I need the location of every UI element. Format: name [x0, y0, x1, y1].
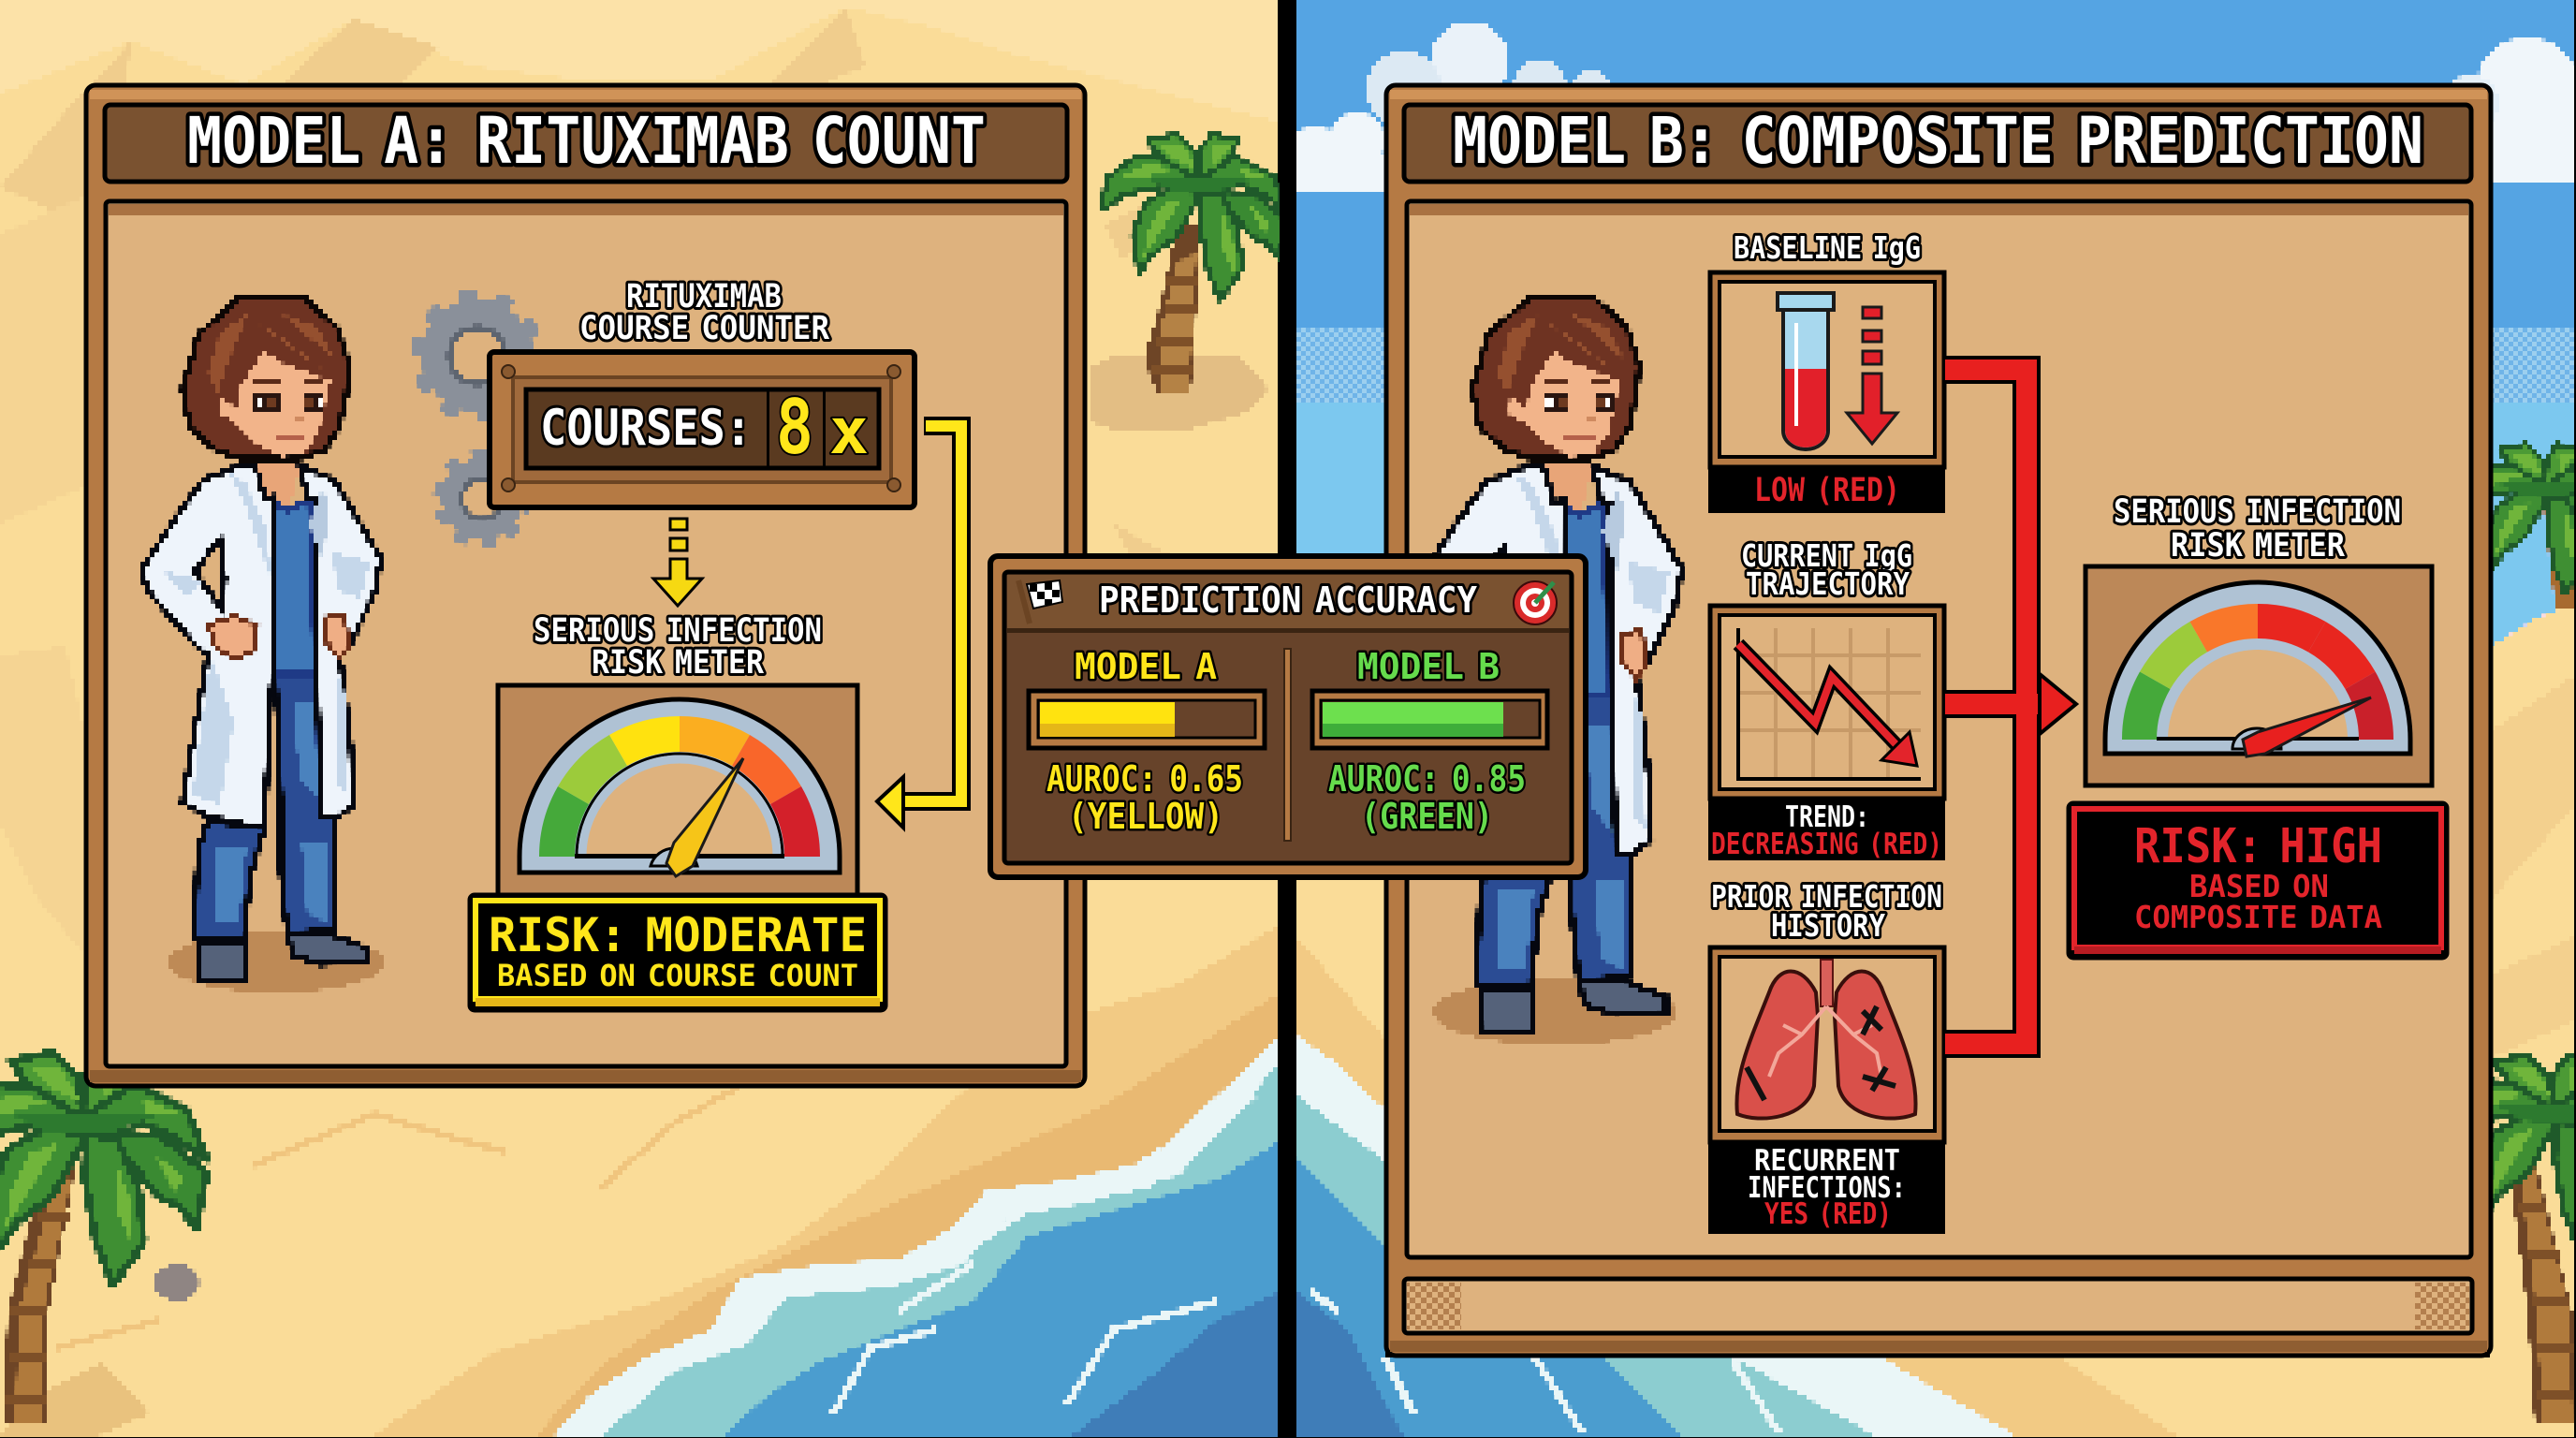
arrows: red connectors merging into meter: [1945, 370, 2076, 1044]
course counter box: [490, 352, 915, 507]
line chart: decreasing: [1738, 628, 1921, 779]
callout: risk high: RISK: HIGH: [2134, 819, 2382, 874]
callout: risk moderate: BASED ON COURSE COUNT: [497, 958, 858, 993]
card: baseline IgG: [1708, 272, 1945, 513]
rock: [154, 1264, 199, 1301]
panel: Model A: [86, 85, 1085, 1086]
column: Model A accuracy: AUROC: 0.65: [1046, 758, 1243, 800]
palm tree: top: [1101, 134, 1287, 395]
gauge needle A: [666, 758, 743, 876]
column: Model B accuracy: (GREEN): [1361, 796, 1493, 837]
panel: Model B: [1386, 85, 2491, 1356]
heading: risk meter B: [2114, 493, 2401, 565]
clouds: [1287, 22, 2576, 193]
heading: course counter: RITUXIMAB: [626, 278, 782, 315]
heading: current IgG trajectory: [1741, 538, 1912, 602]
column: Model A accuracy: [1029, 646, 1265, 837]
course counter box: 8: [776, 384, 813, 471]
heading: baseline IgG: BASELINE IgG: [1734, 230, 1921, 266]
callout: risk moderate: RISK: MODERATE: [489, 908, 867, 962]
card: current IgG trajectory: [1708, 606, 1945, 861]
card: baseline IgG: LOW (RED): [1754, 472, 1900, 509]
heading: current IgG trajectory: TRAJECTORY: [1746, 566, 1910, 602]
heading: prior infection history: PRIOR INFECTION: [1711, 879, 1942, 915]
bottom strip: [1404, 1279, 2472, 1333]
background: sky, ocean and beach (right half): [1287, 0, 2576, 1438]
gauge needle B: [2243, 697, 2371, 756]
card: current IgG trajectory: TREND:: [1785, 800, 1869, 834]
callout: risk high: BASED ON: [2189, 869, 2329, 904]
character: clinician A: [142, 296, 384, 992]
inner panel: Model B: [1407, 201, 2471, 1257]
heading: risk meter B: RISK METER: [2171, 527, 2345, 565]
column: Model B accuracy: AUROC: 0.85: [1328, 758, 1526, 800]
callout: risk high: [2069, 803, 2447, 958]
column: Model A accuracy: MODEL A: [1075, 646, 1217, 687]
heading: course counter: COURSE COUNTER: [579, 310, 829, 347]
callout: risk moderate: [470, 895, 886, 1010]
palm tree: bottom left: [0, 1052, 207, 1425]
heading: current IgG trajectory: CURRENT IgG: [1741, 538, 1912, 574]
column: Model B accuracy: [1312, 646, 1547, 837]
palm tree: upper right: [2494, 440, 2574, 609]
arrow: dashed down to meter: [653, 519, 702, 606]
heading bar: Model B: MODEL B: COMPOSITE PREDICTION: [1453, 104, 2423, 179]
course counter box: x: [829, 395, 869, 469]
column: Model B accuracy: MODEL B: [1357, 646, 1500, 687]
card: prior infection history: [1708, 947, 1945, 1234]
heading: course counter: [579, 278, 829, 347]
card: current IgG trajectory: DECREASING (RED): [1711, 828, 1942, 861]
icon: lungs: [1736, 960, 1916, 1119]
callout: risk high: COMPOSITE DATA: [2134, 900, 2382, 935]
icon: small gear: [438, 455, 526, 543]
panel: prediction accuracy: [990, 556, 1586, 877]
card: prior infection history: INFECTIONS:: [1748, 1171, 1906, 1205]
risk meter B: [2086, 566, 2432, 785]
heading bar: Model A: MODEL A: RITUXIMAB COUNT: [187, 104, 986, 179]
heading: risk meter A: RISK METER: [592, 644, 764, 682]
heading: risk meter A: SERIOUS INFECTION: [534, 612, 822, 650]
heading: risk meter A: [534, 612, 822, 682]
card: prior infection history: YES (RED): [1764, 1197, 1892, 1231]
inner panel: Model A: [106, 201, 1066, 1066]
character: clinician B: [1419, 296, 1682, 1045]
heading: prediction accuracy: PREDICTION ACCURACY: [1099, 580, 1477, 621]
icon: red down arrow: [1847, 307, 1897, 444]
course counter box: COURSES:: [540, 400, 752, 457]
heading: prior infection history: HISTORY: [1771, 908, 1885, 944]
palm tree: lower right: [2494, 1053, 2574, 1423]
icon: test tube: [1778, 293, 1834, 449]
icon: checkered flag: [1018, 580, 1062, 624]
card: prior infection history: RECURRENT: [1754, 1144, 1900, 1178]
heading: prior infection history: [1711, 879, 1942, 944]
center divider: [1280, 0, 1296, 1438]
risk meter A: [498, 685, 857, 899]
icon: large gear: [417, 296, 537, 416]
icon: target: [1514, 581, 1557, 624]
column: Model A accuracy: (YELLOW): [1068, 796, 1223, 837]
heading: risk meter B: SERIOUS INFECTION: [2114, 493, 2401, 531]
arrow: yellow connector to meter: [877, 426, 961, 828]
background: sandy desert beach (left half): [0, 0, 1287, 1438]
shadow under top palm: [1090, 354, 1268, 431]
